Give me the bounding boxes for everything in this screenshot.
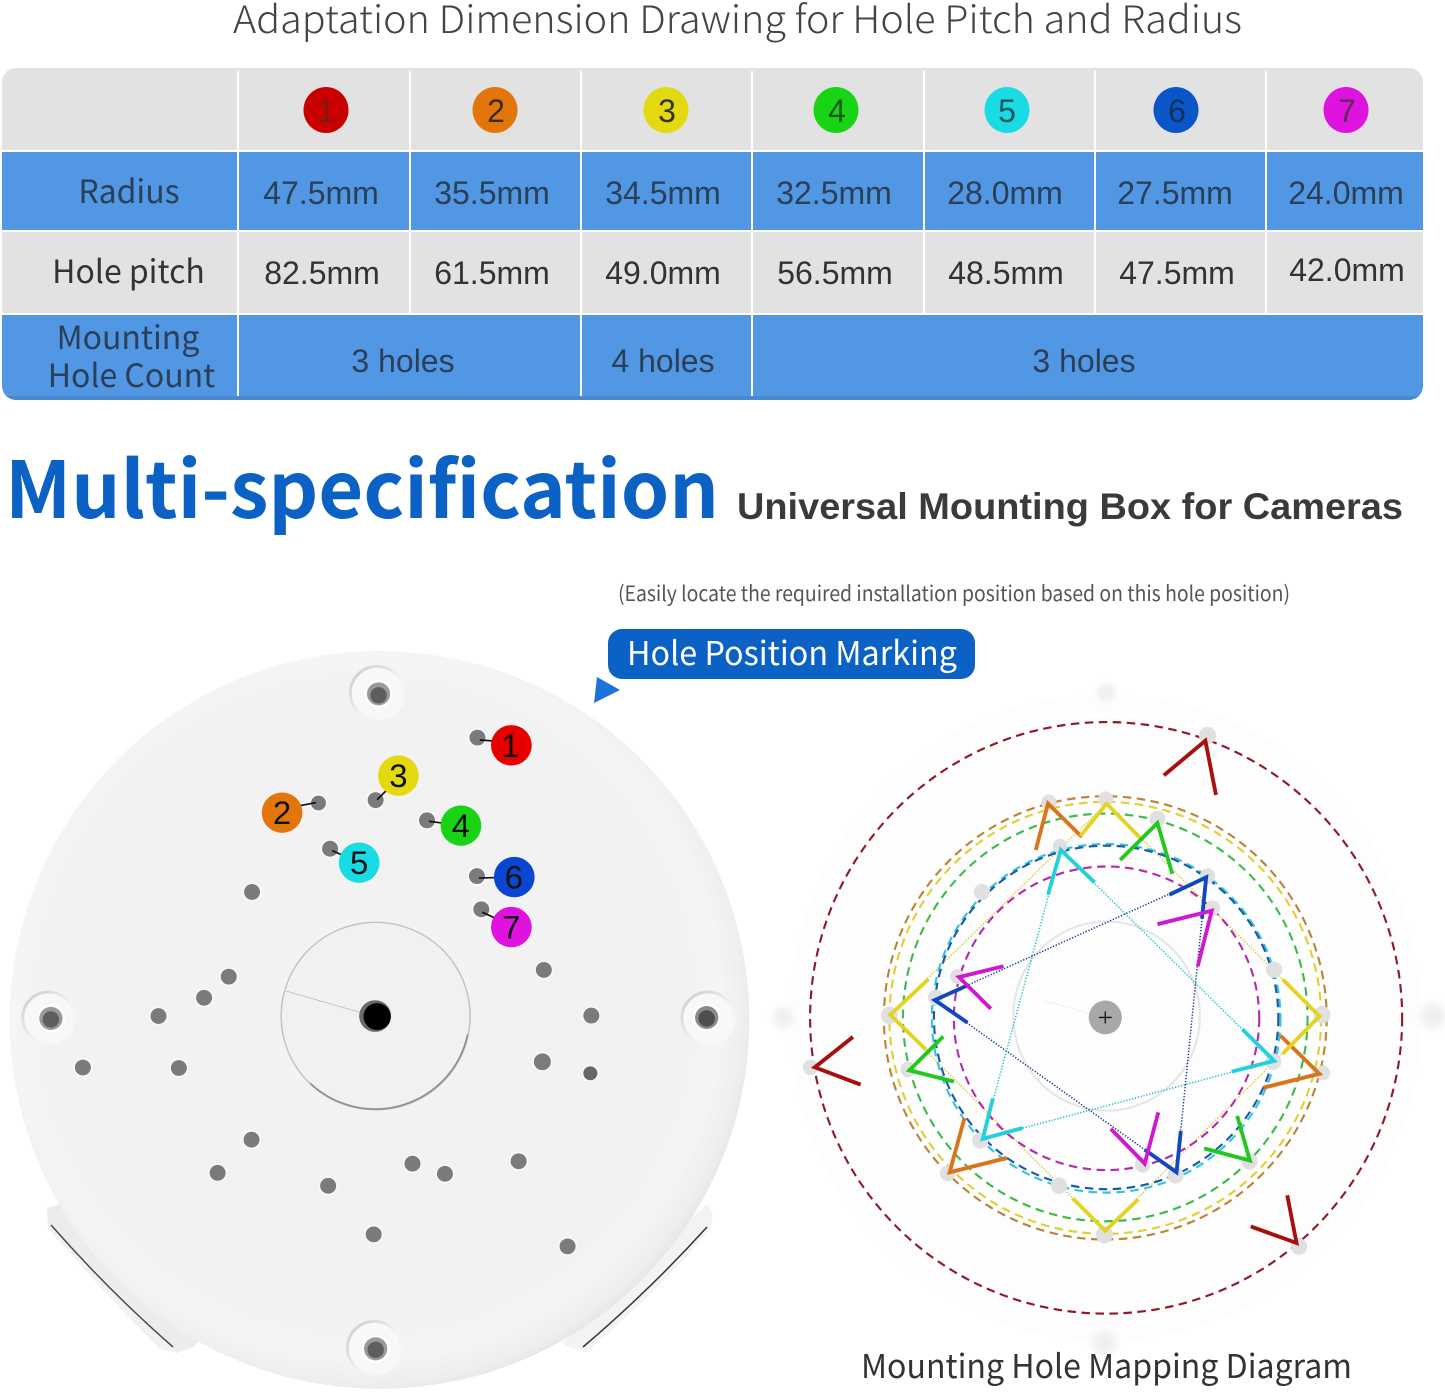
numbered markers: 5 xyxy=(350,844,368,881)
table row: mounting hole count: 4 holes xyxy=(611,343,715,379)
green markers xyxy=(909,823,1250,1161)
table row: hole pitch: 82.5mm xyxy=(264,255,380,291)
magenta markers xyxy=(959,911,1212,1164)
table row: mounting hole count: Hole Count xyxy=(48,351,215,397)
table header: numbered colour keys: 6 xyxy=(1168,93,1186,129)
table row: radius: 28.0mm xyxy=(947,175,1063,211)
centre hole xyxy=(1089,1001,1122,1034)
table row: mounting hole count xyxy=(48,313,1136,397)
table header: numbered colour keys: 3 xyxy=(658,93,676,129)
table row: radius xyxy=(78,167,1404,213)
numbered markers: 3 xyxy=(389,757,408,794)
table row: hole pitch: 56.5mm xyxy=(777,255,893,291)
faint template disc xyxy=(766,677,1445,1365)
table header: numbered colour keys xyxy=(304,87,1368,133)
callout: hole position marking: Hole Position Marking xyxy=(627,627,957,675)
mounting holes xyxy=(74,729,600,1255)
numbered markers: 7 xyxy=(502,909,521,946)
table row: radius: 24.0mm xyxy=(1288,175,1404,211)
table row: radius: 34.5mm xyxy=(605,175,721,211)
table row: hole pitch: Hole pitch xyxy=(52,247,205,293)
table row: hole pitch xyxy=(52,247,1405,293)
table row: mounting hole count: 3 holes xyxy=(1032,343,1136,379)
blue markers xyxy=(935,877,1206,1172)
note: hole position hint: (Easily locate the required installation position based on this hole position) xyxy=(618,578,1290,608)
mounting box photo xyxy=(10,651,749,1389)
table row: radius: 35.5mm xyxy=(434,175,550,211)
callout: hole position marking xyxy=(594,627,975,703)
table row: hole pitch: 61.5mm xyxy=(434,255,550,291)
orange markers xyxy=(950,804,1319,1172)
mounting hole mapping diagram xyxy=(766,677,1445,1365)
central knockout xyxy=(281,922,470,1110)
table row: mounting hole count: Mounting xyxy=(57,313,199,359)
screw bosses xyxy=(23,666,734,1374)
chevron markers xyxy=(815,741,1319,1243)
table row: mounting hole count: 3 holes xyxy=(351,343,455,379)
cyan markers xyxy=(983,850,1274,1139)
table row: hole pitch: 47.5mm xyxy=(1119,255,1235,291)
disc body xyxy=(10,651,749,1389)
table header: numbered colour keys: 4 xyxy=(828,93,846,129)
hole pitch dotted polygons xyxy=(890,804,1319,1231)
table row: hole pitch: 48.5mm xyxy=(948,255,1064,291)
subheading: Universal Mounting Box for Cameras xyxy=(737,486,1403,527)
table header: numbered colour keys: 5 xyxy=(998,93,1016,129)
table row: hole pitch: 42.0mm xyxy=(1289,252,1405,288)
leader lines xyxy=(299,740,497,919)
numbered markers: 4 xyxy=(452,807,470,844)
table: hole specifications xyxy=(2,68,1423,400)
numbered markers: 1 xyxy=(501,727,520,764)
table header: numbered colour keys: 1 xyxy=(317,93,335,129)
heading: multi-specification: Multi-specification xyxy=(5,429,719,541)
table header: numbered colour keys: 7 xyxy=(1338,93,1356,129)
diagram caption: Mounting Hole Mapping Diagram xyxy=(861,1340,1352,1388)
hole positions xyxy=(803,727,1330,1255)
numbered markers: 2 xyxy=(273,794,291,831)
table row: radius: 32.5mm xyxy=(776,175,892,211)
table row: radius: 27.5mm xyxy=(1117,175,1233,211)
table header: numbered colour keys: 2 xyxy=(487,93,505,129)
numbered markers xyxy=(262,725,535,947)
yellow markers xyxy=(890,804,1319,1231)
table row: radius: Radius xyxy=(78,167,180,213)
radius circles xyxy=(810,722,1402,1314)
cable tabs xyxy=(47,1204,713,1353)
numbered markers: 6 xyxy=(505,859,523,896)
table row: radius: 47.5mm xyxy=(263,175,379,211)
red markers xyxy=(815,741,1297,1243)
table row: hole pitch: 49.0mm xyxy=(605,255,721,291)
